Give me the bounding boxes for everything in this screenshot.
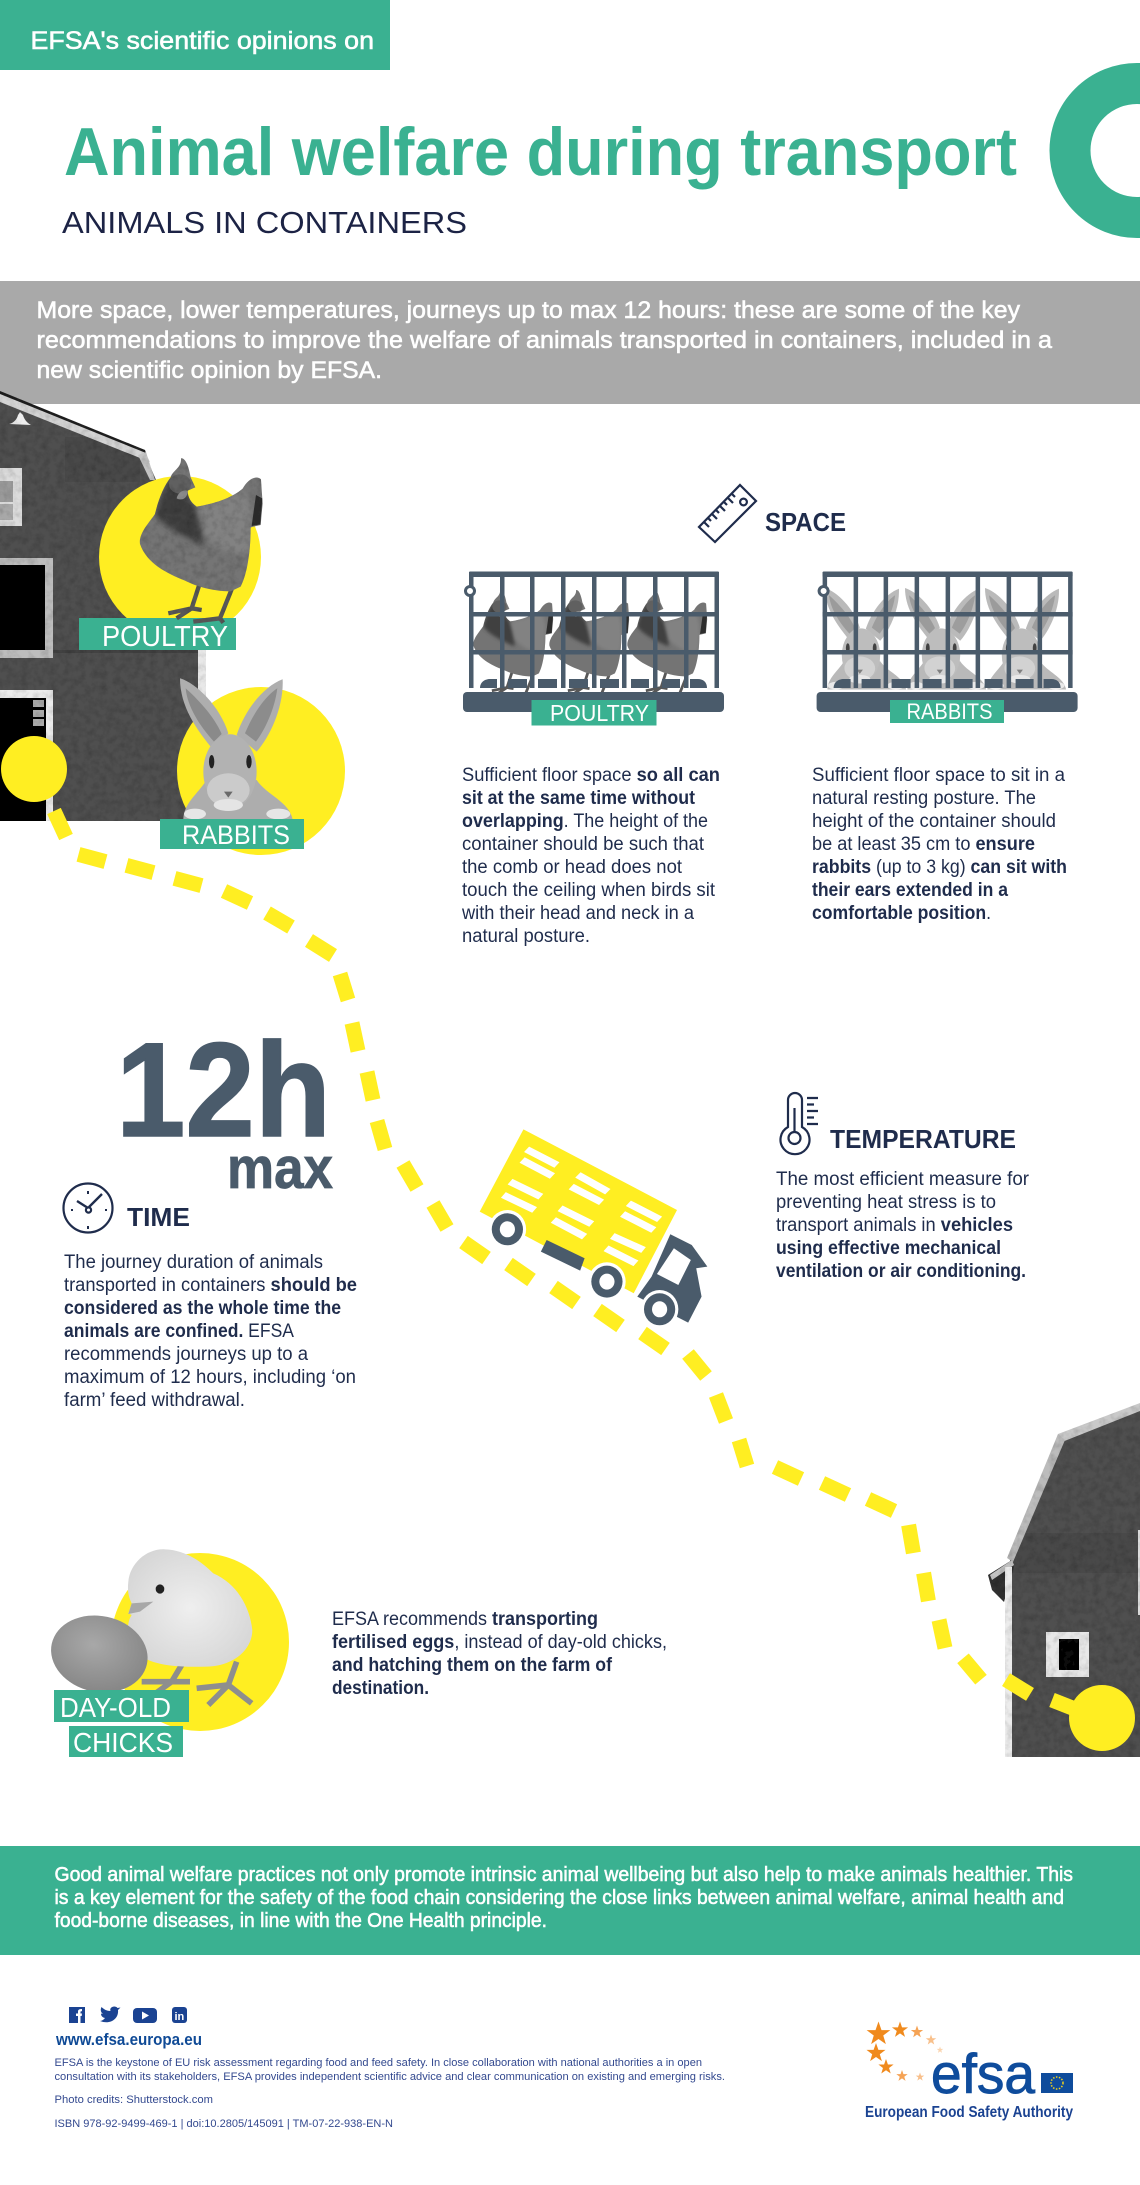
barn: origin farm (0, 391, 206, 821)
rabbit illustration (160, 678, 345, 855)
EFSA logo: European Food Safety Authority (865, 2104, 1073, 2121)
text: temperature: The most efficient measure for (776, 1169, 1030, 1190)
truck cab (637, 1234, 707, 1323)
text: temperature: ventilation or air conditioning. (776, 1261, 1026, 1282)
text: time: transported in containers should be (64, 1275, 357, 1296)
EFSA logo: efsa (931, 2042, 1036, 2105)
text: temperature: preventing heat stress is to (776, 1192, 996, 1213)
route: final dashes (868, 1499, 1080, 1711)
conclusion band: Good animal welfare practices not only promote intrinsic animal wellbeing but also help to make animals healthier. This (54, 1863, 1073, 1886)
route start marker (1, 736, 67, 802)
EFSA logo (865, 2022, 1073, 2121)
text: chicks: destination. (332, 1678, 429, 1699)
figure: 12h max: max (227, 1136, 333, 1201)
text: rabbit space: Sufficient floor space to sit in a (812, 765, 1065, 786)
text: poultry space: sit at the same time without (462, 788, 696, 809)
text: chicks: EFSA recommends transporting (332, 1609, 598, 1630)
barn lamp (9, 412, 31, 425)
text: rabbit space: height of the container should (812, 811, 1056, 832)
text: poultry space: container should be such that (462, 834, 705, 855)
poultry illustration (79, 458, 263, 653)
text: poultry space: natural posture. (462, 926, 590, 947)
intro band: recommendations to improve the welfare of animals transported in containers, included in a (36, 327, 1053, 354)
icon: clock (64, 1184, 112, 1232)
conclusion band (0, 1846, 1140, 1955)
text: poultry space: with their head and neck in a (461, 903, 694, 924)
logo EU flag (1041, 2073, 1073, 2093)
footer text: consultation with its stakeholders, EFSA provides independent scientific advice and clear communication on existing and emerging risks. (54, 2071, 725, 2083)
section: space heading: SPACE (765, 507, 846, 537)
header tag (0, 0, 390, 70)
route end marker (1069, 1685, 1135, 1751)
footer text: Photo credits: Shutterstock.com (54, 2094, 213, 2106)
text: rabbit space: comfortable position. (812, 903, 991, 924)
rabbits container label: RABBITS (906, 699, 992, 724)
text: temperature: using effective mechanical (776, 1238, 1001, 1259)
poultry container (463, 572, 724, 726)
icon: facebook (69, 2007, 85, 2023)
rabbits in container (825, 588, 1066, 690)
chicks label: CHICKS (73, 1727, 173, 1758)
barn window (1046, 1632, 1089, 1677)
text: temperature (776, 1169, 1030, 1282)
intro band (0, 281, 1140, 404)
barn: destination farm (988, 1403, 1140, 1757)
text: rabbit space: their ears extended in a (812, 880, 1008, 901)
day-old label: DAY-OLD (60, 1692, 171, 1723)
icon: youtube (133, 2008, 157, 2023)
social icons (69, 2007, 187, 2023)
intro band: new scientific opinion by EFSA. (36, 357, 382, 384)
poultry label: POULTRY (102, 621, 228, 653)
icon: truck (480, 1129, 707, 1329)
text: chicks: fertilised eggs, instead of day-old chicks, (332, 1632, 667, 1653)
conclusion band: is a key element for the safety of the food chain considering the close links between animal welfare, animal health and (54, 1886, 1064, 1909)
text: time: recommends journeys up to a (64, 1344, 308, 1365)
text: poultry space: touch the ceiling when birds sit (462, 880, 716, 901)
decorative green ring (1070, 84, 1140, 218)
text: rabbit space: natural resting posture. The (812, 788, 1036, 809)
text: rabbit space: rabbits (up to 3 kg) can sit with (812, 857, 1067, 878)
intro band: More space, lower temperatures, journeys up to max 12 hours: these are some of the key (36, 297, 1020, 324)
hen photo (140, 458, 263, 623)
rabbit photo (180, 678, 293, 819)
text: time: considered as the whole time the (64, 1298, 341, 1319)
day-old chicks illustration (44, 1549, 289, 1758)
text: time (64, 1252, 357, 1411)
barn upper door (0, 558, 53, 658)
truck wheels (489, 1210, 678, 1329)
hens in container (473, 590, 707, 697)
footer text (54, 2057, 725, 2130)
section: space heading (699, 485, 846, 542)
section: temperature heading (780, 1093, 1016, 1154)
text: time: farm’ feed withdrawal. (64, 1390, 245, 1411)
icon: linkedin: in (174, 2011, 185, 2023)
route: dashed yellow path (54, 811, 848, 1495)
rabbit container (817, 572, 1078, 724)
icon: ruler (699, 485, 756, 542)
header tag: EFSA's scientific opinions on (30, 27, 374, 55)
subtitle: ANIMALS IN CONTAINERS (62, 205, 467, 240)
text: chicks: and hatching them on the farm of (332, 1655, 613, 1676)
barn window (0, 468, 22, 526)
conclusion band: food-borne diseases, in line with the One Health principle. (54, 1909, 547, 1932)
text: time: The journey duration of animals (64, 1252, 323, 1273)
title: Animal welfare during transport (64, 114, 1017, 190)
figure: 12h max: 12h (116, 1016, 331, 1165)
text: poultry space (461, 765, 720, 947)
section: temperature heading: TEMPERATURE (830, 1124, 1016, 1154)
footer text: EFSA is the keystone of EU risk assessment regarding food and feed safety. In close collaboration with national authorities a in open (54, 2057, 702, 2069)
text: rabbit space: be at least 35 cm to ensure (812, 834, 1035, 855)
text: time: maximum of 12 hours, including ‘on (64, 1367, 356, 1388)
website: www.efsa.europa.eu (55, 2031, 202, 2049)
text: poultry space: overlapping. The height of the (462, 811, 708, 832)
truck slats (503, 1149, 660, 1263)
barn lower door (0, 690, 53, 821)
icon: twitter (100, 2007, 120, 2022)
text: chicks (332, 1609, 667, 1699)
truck body (480, 1129, 677, 1293)
rabbits label: RABBITS (182, 820, 290, 850)
text: poultry space: Sufficient floor space so all can (462, 765, 720, 786)
poultry container label: POULTRY (550, 700, 649, 726)
text: time: animals are confined. EFSA (64, 1321, 294, 1342)
text: rabbit space (812, 765, 1067, 924)
footer text: ISBN 978-92-9499-469-1 | doi:10.2805/145091 | TM-07-22-938-EN-N (54, 2118, 393, 2130)
text: temperature: transport animals in vehicles (776, 1215, 1013, 1236)
logo stars (866, 2022, 943, 2081)
section: time heading (64, 1184, 190, 1232)
icon: thermometer (780, 1093, 818, 1154)
section: time heading: TIME (127, 1202, 190, 1232)
text: poultry space: the comb or head does not (462, 857, 683, 878)
chick and egg photo (44, 1549, 252, 1705)
truck underbar (541, 1240, 585, 1271)
